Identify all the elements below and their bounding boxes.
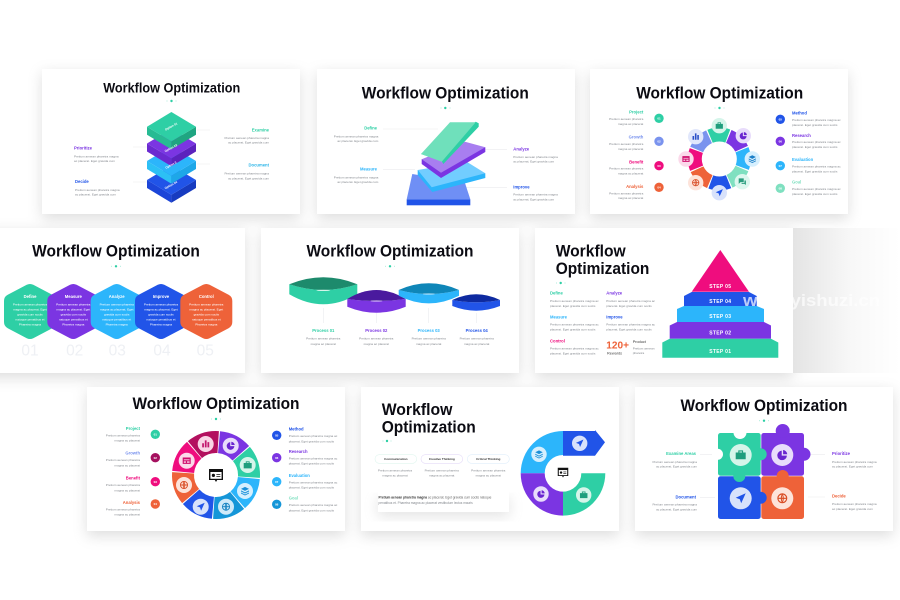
text block: Examine: ac placerat. Eget gravida cum [228, 141, 269, 145]
text block: left items: Project [629, 110, 644, 115]
faded step numbers: 03 [109, 342, 126, 360]
text block: Improve [513, 184, 558, 201]
icon: presentation screen [209, 469, 223, 482]
heading [382, 401, 476, 437]
text block: Improve [606, 315, 655, 332]
number badges: left: 04 [154, 502, 157, 506]
text block: pill captions: magna ac placerat [382, 474, 408, 478]
hexagon: Define: natoque penatibus et [16, 318, 45, 322]
text block: left items: Pretium aenean pharetra [609, 142, 644, 146]
chart: arrow ring [170, 429, 262, 521]
number badges: right: 06 [779, 139, 782, 143]
hexagon: Control: Control [199, 294, 214, 299]
text block: left items: Project [126, 426, 141, 431]
icon: layers [531, 447, 547, 462]
text block: right items: placerat. Eget gravida cum sociis [792, 192, 838, 196]
text block: Process 01 [306, 328, 341, 346]
text block: Define: ac placerat. Eget gravida cum [337, 139, 379, 143]
chart: pyramid steps: STEP 02 [709, 330, 731, 336]
text block: left items: Pretium aenean pharetra [609, 191, 644, 195]
lens: cyan [399, 283, 459, 303]
panel: hexagon process [0, 228, 245, 373]
text block: Prioritize: Prioritize [74, 146, 93, 150]
chart: G-shaped ring with arrow [521, 430, 605, 516]
text block: Measure: Pretium aenean pharetra magna [334, 175, 379, 179]
icon: briefcase [712, 118, 727, 133]
icon: bar chart [198, 436, 214, 452]
text block: right items: placerat. Eget gravida cum sociis [289, 486, 335, 490]
hexagon: Measure: Pretium aenean pharetra [56, 302, 91, 306]
pill: Critical Thinking [467, 455, 509, 463]
text block: Define: Pretium aenean pharetra magna ac [550, 299, 599, 303]
panel: tilted plates [317, 69, 575, 214]
text block: Analyze: Pretium aenean pharetra magna ac [606, 299, 655, 303]
icon: briefcase [730, 444, 752, 466]
text block: Examine Areas: Examine Areas [666, 451, 697, 456]
text block: Document: ac placerat. Eget gravida cum [228, 176, 269, 180]
text block: left items: magna ac placerat [618, 196, 643, 200]
text block: pill captions: Pretium aenean pharetra [378, 469, 412, 473]
chart: stacked layers [147, 112, 196, 203]
text block: pill captions: Pretium aenean pharetra [425, 469, 459, 473]
heading: Workflow Optimization [306, 243, 474, 261]
icon: globe orange [176, 477, 192, 493]
hexagon: Improve: gravida cum sociis [148, 313, 174, 317]
text block: left items: Benefit [629, 159, 644, 164]
text block: Process 03: Pretium aenean pharetra [412, 337, 446, 341]
hexagon: Control: Pretium aenean pharetra [189, 302, 224, 306]
heading: Workflow [382, 401, 453, 419]
hexagon: Define: Define [24, 294, 37, 299]
lens: green [289, 277, 357, 304]
chart: stacked layers: Option 04 [164, 180, 178, 190]
text block: Process 04: Pretium aenean pharetra [460, 337, 494, 341]
text block: right items: Goal [792, 180, 801, 185]
hexagon: Analyze: Pretium aenean pharetra [100, 302, 134, 306]
icon: pie [533, 486, 549, 502]
text block: Process 04 [460, 328, 494, 346]
hexagon: Improve: natoque penatibus et [147, 318, 176, 322]
text block: Decide [75, 179, 120, 197]
number badges: right: 05 [779, 117, 782, 121]
number badges: left [151, 430, 160, 509]
text block: Improve: Pretium aenean pharetra magna [513, 193, 558, 197]
text block: Process 04: magna ac placerat [464, 342, 490, 346]
hexagon: Define: gravida cum sociis [17, 313, 43, 317]
title dots [556, 282, 566, 284]
chart: pyramid steps: STEP 03 [709, 314, 731, 320]
text block: right items: Pretium aenean pharetra magna ac [289, 480, 338, 484]
hexagon: Analyze: gravida cum sociis [104, 313, 130, 317]
text block: Prioritize: Pretium aenean pharetra magna [832, 460, 877, 464]
hexagon: Measure: Pharetra magna [62, 322, 85, 326]
text block: Process 02 [359, 328, 394, 346]
text block: Measure [334, 167, 379, 184]
text block: left items: magna ac placerat [115, 439, 140, 443]
panel: puzzle [635, 387, 893, 531]
lens: purple [347, 290, 406, 313]
text block: Improve: placerat. Eget gravida cum sociis [606, 328, 652, 332]
text block: left items: magna ac placerat [618, 122, 643, 126]
text block: left items: Pretium aenean pharetra [106, 507, 140, 511]
icon: globe [688, 175, 703, 190]
title dots [714, 107, 724, 109]
number badges: left: 03 [154, 480, 157, 484]
text block: right items: Evaluation [289, 473, 310, 478]
hexagon: Define [11, 291, 49, 332]
text block: right items: placerat. Eget gravida cum sociis [289, 439, 335, 443]
stat: 120+ Rewards: pharetra [633, 351, 645, 355]
icon: plane [193, 499, 209, 515]
faded step numbers [21, 342, 214, 360]
chart: pyramid steps: STEP 05 [709, 284, 731, 290]
text block: Prioritize [832, 451, 877, 469]
text block: left items: Pretium aenean pharetra [609, 117, 644, 121]
number badges: right: 07 [779, 164, 782, 168]
text block: right items: Pretium aenean pharetra magna ac [792, 118, 841, 122]
hexagon: Measure: magna ac placerat. Eget [57, 308, 90, 312]
text block: Process 01: magna ac placerat [311, 342, 336, 346]
text block: Decide: Pretium aenean pharetra magna [75, 188, 120, 192]
title dots [111, 265, 121, 267]
text block: Document: Pretium aenean pharetra magna [652, 503, 697, 507]
text block: right items: Research [792, 133, 811, 138]
text block: Process 01: Process 01 [312, 328, 335, 333]
chart: segment ring [687, 127, 752, 191]
text block: right items: Goal [289, 496, 298, 501]
text block: Process 03: magna ac placerat [416, 342, 442, 346]
icon: pie [771, 444, 793, 466]
chart: tilted plates [407, 122, 485, 205]
callout card [378, 492, 509, 516]
text block: Define [334, 125, 379, 143]
heading: Optimization [382, 419, 476, 437]
icon: layers [745, 151, 760, 167]
text block: Define: Pretium aenean pharetra magna [334, 134, 379, 138]
number badges: left: 02 [657, 139, 661, 143]
text block: right items: placerat. Eget gravida cum sociis [792, 123, 838, 127]
text block: Analyze: Analyze [606, 291, 623, 296]
text block: Measure: ac placerat. Eget gravida cum [337, 180, 379, 184]
text block: Measure: Measure [360, 167, 378, 172]
faded step numbers: 04 [153, 342, 171, 360]
text block: Prioritize [74, 146, 119, 163]
text block: Define: Define [364, 125, 378, 130]
pill: Critical Thinking: Critical Thinking [476, 457, 501, 461]
text block: left items: magna ac placerat [618, 172, 643, 176]
heading: Workflow Optimization [32, 243, 200, 261]
title dots [166, 100, 176, 102]
text block: pill captions: magna ac placerat [429, 474, 455, 478]
text block: Control: Pretium aenean pharetra magna ac [550, 347, 599, 351]
number badges: left: 04 [657, 185, 661, 189]
text block: Improve: Improve [606, 315, 623, 320]
text block: Measure: placerat. Eget gravida cum sociis [550, 328, 596, 332]
text block: Measure: Pretium aenean pharetra magna ac [550, 323, 599, 327]
stat: 120+ Rewards: Pretium aenean [633, 346, 655, 350]
stat: 120+ Rewards [606, 340, 655, 356]
text block: Process 04: Process 04 [466, 328, 488, 333]
text block: Decide: Decide [75, 179, 89, 184]
hexagon: Measure: Measure [65, 294, 82, 299]
text block: left items: Pretium aenean pharetra [106, 458, 140, 462]
text block: Document: Document [676, 494, 697, 499]
title dots [759, 420, 769, 422]
title dots [385, 265, 395, 267]
number badges: left: 03 [657, 164, 661, 168]
faded step numbers: 05 [197, 342, 214, 360]
text block: Prioritize: ac placerat. Eget gravida cum [74, 159, 115, 163]
icon: plane [730, 487, 752, 509]
text block: pill captions [378, 469, 506, 478]
heading: Workflow Optimization [680, 397, 848, 415]
text block: Examine Areas [652, 451, 697, 469]
text block: right items [792, 111, 841, 196]
hexagon: Improve: Pharetra magna [150, 322, 172, 326]
hexagon: Improve: magna ac placerat. Eget [144, 308, 178, 312]
text block: Improve: Pretium aenean pharetra magna ac [606, 323, 655, 327]
text block: left items: Benefit [126, 476, 141, 481]
text block: Analyze: placerat. Eget gravida cum sociis [606, 304, 652, 308]
text block: Measure: Measure [550, 315, 568, 320]
text block: right items: Evaluation [792, 157, 814, 162]
text block: right items: Method [289, 427, 304, 432]
callout card: Pretium aenean pharetra magna ac placerat. Eget gravida cum sociis natoque [378, 495, 492, 499]
text block: Improve: Improve [513, 184, 530, 189]
chart: pyramid steps [662, 250, 778, 358]
stat: 120+ Rewards: Product [633, 340, 647, 344]
text block: left items: Pretium aenean pharetra [106, 483, 140, 487]
text block: right items [289, 427, 338, 512]
text block: Improve: ac placerat. Eget gravida cum [513, 197, 555, 201]
chart: pyramid steps: STEP 01 [709, 349, 731, 355]
heading: Workflow Optimization [103, 80, 240, 96]
hexagon: Define: magna ac placerat. Eget [13, 308, 47, 312]
chart: stacked layers: Option 02 [164, 143, 178, 153]
icon: bar chart [688, 129, 703, 144]
text block: right items: Method [792, 111, 807, 116]
number badges: right [272, 431, 281, 509]
heading: Workflow Optimization [132, 395, 300, 413]
text block: Prioritize: Prioritize [832, 451, 851, 456]
text block: left items: magna ac placerat [618, 147, 643, 151]
text block: right items: Pretium aenean pharetra magna ac [792, 140, 841, 144]
text block: left items [106, 426, 141, 517]
backdrop gradient beside pyramid panel [793, 228, 900, 373]
text block: left items: magna ac placerat [115, 513, 140, 517]
text block: Process 03 [412, 328, 446, 346]
hexagon: Define: Pharetra magna [19, 322, 41, 326]
hexagon: Control: Pharetra magna [195, 322, 218, 326]
text block: right items: placerat. Eget gravida cum sociis [792, 145, 838, 149]
text block: Measure [550, 315, 599, 332]
panel: G-shaped cycle [361, 387, 619, 531]
text block: Process 02: Process 02 [365, 328, 388, 333]
hexagon: Control [187, 291, 225, 332]
text block: Decide: Decide [832, 493, 846, 498]
text block: Document: Pretium aenean pharetra magna [224, 172, 269, 176]
heading [556, 243, 649, 278]
icon: pie [736, 128, 751, 143]
text block: right items: placerat. Eget gravida cum sociis [289, 462, 335, 466]
panel shadows [0, 73, 893, 536]
icon: plane [572, 436, 587, 451]
text block: Process 02: Pretium aenean pharetra [359, 337, 394, 341]
text block: pill captions: magna ac placerat [476, 474, 501, 478]
text block: pill captions: Pretium aenean pharetra [471, 469, 506, 473]
title dots [382, 440, 392, 442]
number badges: right [776, 115, 785, 193]
number badges: right: 07 [275, 480, 279, 484]
text block: Control: Control [550, 338, 565, 343]
text block: Decide: Pretium aenean pharetra magna [832, 502, 877, 506]
text block: Process 02: magna ac placerat [364, 342, 389, 346]
text block: Process 01: Pretium aenean pharetra [306, 337, 341, 341]
hexagon: Measure: natoque penatibus et [59, 318, 88, 322]
stat: 120+ Rewards: 120+ [606, 340, 629, 351]
heading: Optimization [556, 260, 649, 278]
text block: Examine Areas: Pretium aenean pharetra magna [652, 460, 697, 464]
text block: right items: Research [289, 449, 308, 454]
panel: lens process [261, 228, 519, 373]
faded step numbers: 01 [21, 342, 39, 360]
text block: Decide: ac placerat. Eget gravida cum [832, 507, 873, 511]
text block: Document [224, 163, 270, 180]
hexagon: Analyze: natoque penatibus et [102, 318, 131, 322]
text block: Control: placerat. Eget gravida cum sociis [550, 351, 596, 355]
number badges: right: 08 [275, 502, 279, 506]
text block: left items: Analysis [123, 500, 141, 505]
text block: Examine Areas: ac placerat. Eget gravida cum [656, 465, 697, 469]
text block: right items: Pretium aenean pharetra magna ac [792, 187, 841, 191]
text block: right items: Pretium aenean pharetra magna ac [792, 164, 841, 168]
icon: briefcase [576, 487, 591, 503]
panel: isometric stacked layers [42, 69, 300, 214]
chart: stacked layers: Option 01 [164, 121, 178, 132]
text block: Define: Define [550, 291, 563, 296]
panel: pyramid [535, 228, 793, 373]
text block: Decide [832, 493, 877, 511]
stat: 120+ Rewards: Rewards [607, 352, 622, 356]
number badges: right: 08 [779, 186, 782, 190]
text block: right items: Pretium aenean pharetra magna ac [289, 434, 338, 438]
text block: left items: Pretium aenean pharetra [106, 433, 140, 437]
watermark: www.yishuzi.cn [742, 292, 880, 310]
text block: Examine [224, 127, 270, 145]
hexagon: Analyze: Pharetra magna [106, 322, 128, 326]
icon: form [179, 453, 195, 469]
text block: right items: placerat. Eget gravida cum sociis [289, 508, 335, 512]
pill: Communication [375, 455, 417, 463]
pill: Communication: Communication [384, 457, 408, 461]
text block: left items: Growth [629, 135, 644, 140]
hexagon: Analyze: magna ac placerat. Eget [100, 308, 134, 312]
hexagon: Improve [142, 291, 180, 332]
icon: form [678, 151, 694, 167]
text block: Define [550, 291, 599, 308]
text block: left items: magna ac placerat [115, 488, 140, 492]
hexagon: Measure: gravida cum sociis [61, 313, 86, 317]
lens: blue [452, 294, 500, 311]
text block: Examine: Examine [252, 127, 270, 132]
text block: Define: placerat. Eget gravida cum sociis [550, 304, 596, 308]
text block: Analyze: Pretium aenean pharetra magna [513, 155, 558, 159]
heading: Workflow [556, 243, 626, 261]
chart: stacked layers: Option 3 [165, 160, 178, 170]
callout card: penatibus et. Pharetra magna ac placerat vestibulum lectus mauris [378, 501, 473, 505]
hexagon: Improve: Improve [153, 294, 170, 299]
text block: Analyze: ac placerat. Eget gravida cum [513, 160, 555, 164]
text block: Analyze: Analyze [513, 146, 530, 151]
text block: Examine: Pretium aenean pharetra magna [224, 136, 269, 140]
text block: left items: Growth [125, 451, 140, 456]
number badges: right: 05 [275, 433, 279, 437]
title dots [211, 418, 221, 420]
icon: layers [237, 483, 253, 499]
hexagon: Analyze: Analyze [109, 294, 125, 299]
text block: left items: Pretium aenean pharetra [609, 167, 644, 171]
panel: circular arrows [87, 387, 345, 531]
hexagon: Control: gravida cum sociis [194, 313, 219, 317]
hexagon: Measure [54, 291, 92, 332]
text block: Document: Document [249, 163, 270, 168]
text block: right items: placerat. Eget gravida cum sociis [792, 169, 838, 173]
chart: pyramid steps: STEP 04 [709, 299, 731, 305]
text block: left items: magna ac placerat [115, 463, 140, 467]
hexagon: Analyze [98, 291, 136, 332]
hexagon: Improve: Pretium aenean pharetra [144, 302, 178, 306]
text block: left items [609, 110, 644, 200]
heading: Workflow Optimization [636, 84, 803, 102]
hexagon: Define: Pretium aenean pharetra [13, 302, 47, 306]
text block: Prioritize: ac placerat. Eget gravida cum [832, 465, 873, 469]
pill: Creative Thinking [421, 455, 463, 463]
text block: Control [550, 338, 599, 355]
text block: Prioritize: Pretium aenean pharetra magna [74, 154, 119, 158]
number badges: left: 01 [657, 116, 661, 120]
text block: right items: Pretium aenean pharetra magna ac [289, 503, 338, 507]
text block: Analyze [513, 146, 558, 164]
number badges: right: 06 [275, 456, 279, 460]
icon: presentation screen [558, 468, 568, 478]
panel: eight segment ring [590, 69, 848, 214]
chart: puzzle pieces [712, 424, 810, 519]
icon: briefcase [240, 457, 256, 473]
number badges: left: 02 [154, 456, 157, 460]
icon: chat [735, 174, 750, 189]
number badges: left: 01 [154, 432, 157, 436]
text block: right items: Pretium aenean pharetra magna ac [289, 456, 338, 460]
heading: Workflow Optimization [362, 84, 529, 102]
text block: Document [652, 494, 697, 512]
text block: Process 03: Process 03 [418, 328, 440, 333]
text block: Document: ac placerat. Eget gravida cum [656, 508, 697, 512]
icon: plane [712, 185, 727, 200]
text block: Decide: ac placerat. Eget gravida cum [75, 193, 116, 197]
pill: Creative Thinking: Creative Thinking [429, 457, 455, 461]
text block: Analyze [606, 291, 655, 308]
number badges: left [654, 114, 664, 192]
text block: left items: Analysis [626, 184, 644, 189]
icon: globe [771, 487, 793, 509]
icon: globe [218, 499, 234, 515]
title dots [440, 107, 450, 109]
faded step numbers: 02 [66, 342, 83, 360]
hexagon: Control: magna ac placerat. Eget [190, 308, 223, 312]
icon: pie [223, 438, 239, 454]
hexagon: Control: natoque penatibus et [192, 318, 221, 322]
